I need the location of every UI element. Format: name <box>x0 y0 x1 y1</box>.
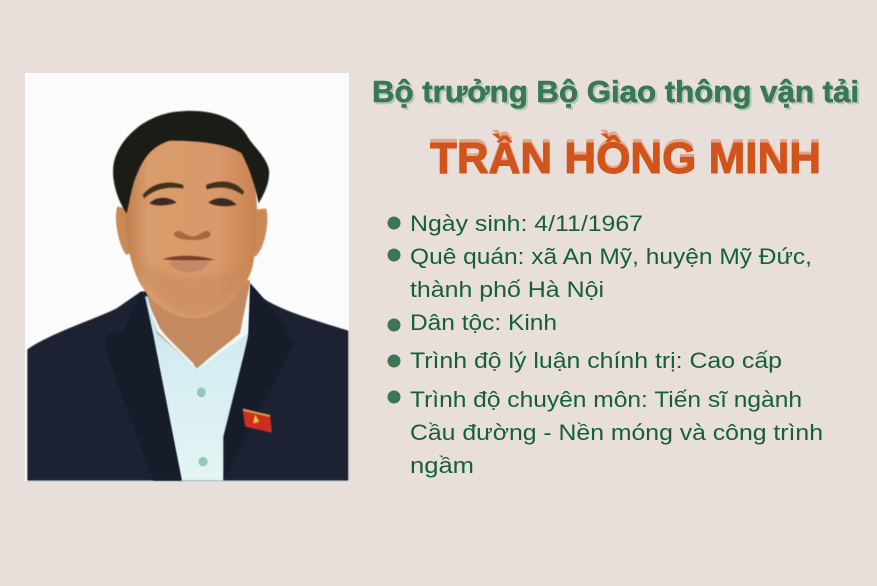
heading: role: Bộ trưởng Bộ Giao thông vận tải <box>372 74 859 109</box>
jacket <box>27 283 348 481</box>
ears <box>116 207 267 257</box>
eyes <box>149 198 237 206</box>
item: date of birth: Ngày sinh: 4/11/1967 <box>410 211 643 236</box>
item: hometown: Quê quán: xã An Mỹ, huyện Mỹ Đức, <box>410 244 812 269</box>
heading: name: TRẦN HỒNG MINH <box>430 130 821 181</box>
item: political theory: Trình độ lý luận chính trị: Cao cấp <box>410 348 782 373</box>
heading: role: Bộ trưởng Bộ Giao thông vận tải <box>374 76 861 111</box>
item: ethnicity: Dân tộc: Kinh <box>410 310 557 335</box>
face <box>125 126 257 318</box>
portrait photo <box>25 73 349 481</box>
item: professional qualification <box>388 387 823 478</box>
item: professional qualification: ngầm <box>410 453 474 478</box>
heading: name: TRẦN HỒNG MINH <box>430 133 821 183</box>
shirt <box>145 283 250 481</box>
item: hometown: thành phố Hà Nội <box>410 277 604 302</box>
cheek shading <box>135 257 250 315</box>
item: hometown <box>388 244 812 302</box>
eyebrows <box>143 182 244 198</box>
mouth <box>163 256 215 272</box>
right lapel <box>223 284 295 481</box>
hair <box>113 111 269 213</box>
item: professional qualification: Trình độ chuyên môn: Tiến sĩ ngành <box>410 387 802 412</box>
neck <box>146 280 250 368</box>
bullet list <box>388 211 823 478</box>
badge <box>243 409 272 433</box>
buttons <box>197 387 208 466</box>
item: professional qualification: Cầu đường - Nền móng và công trình <box>410 420 823 445</box>
left lapel <box>105 293 182 481</box>
nose <box>174 231 211 240</box>
collar <box>145 283 250 370</box>
